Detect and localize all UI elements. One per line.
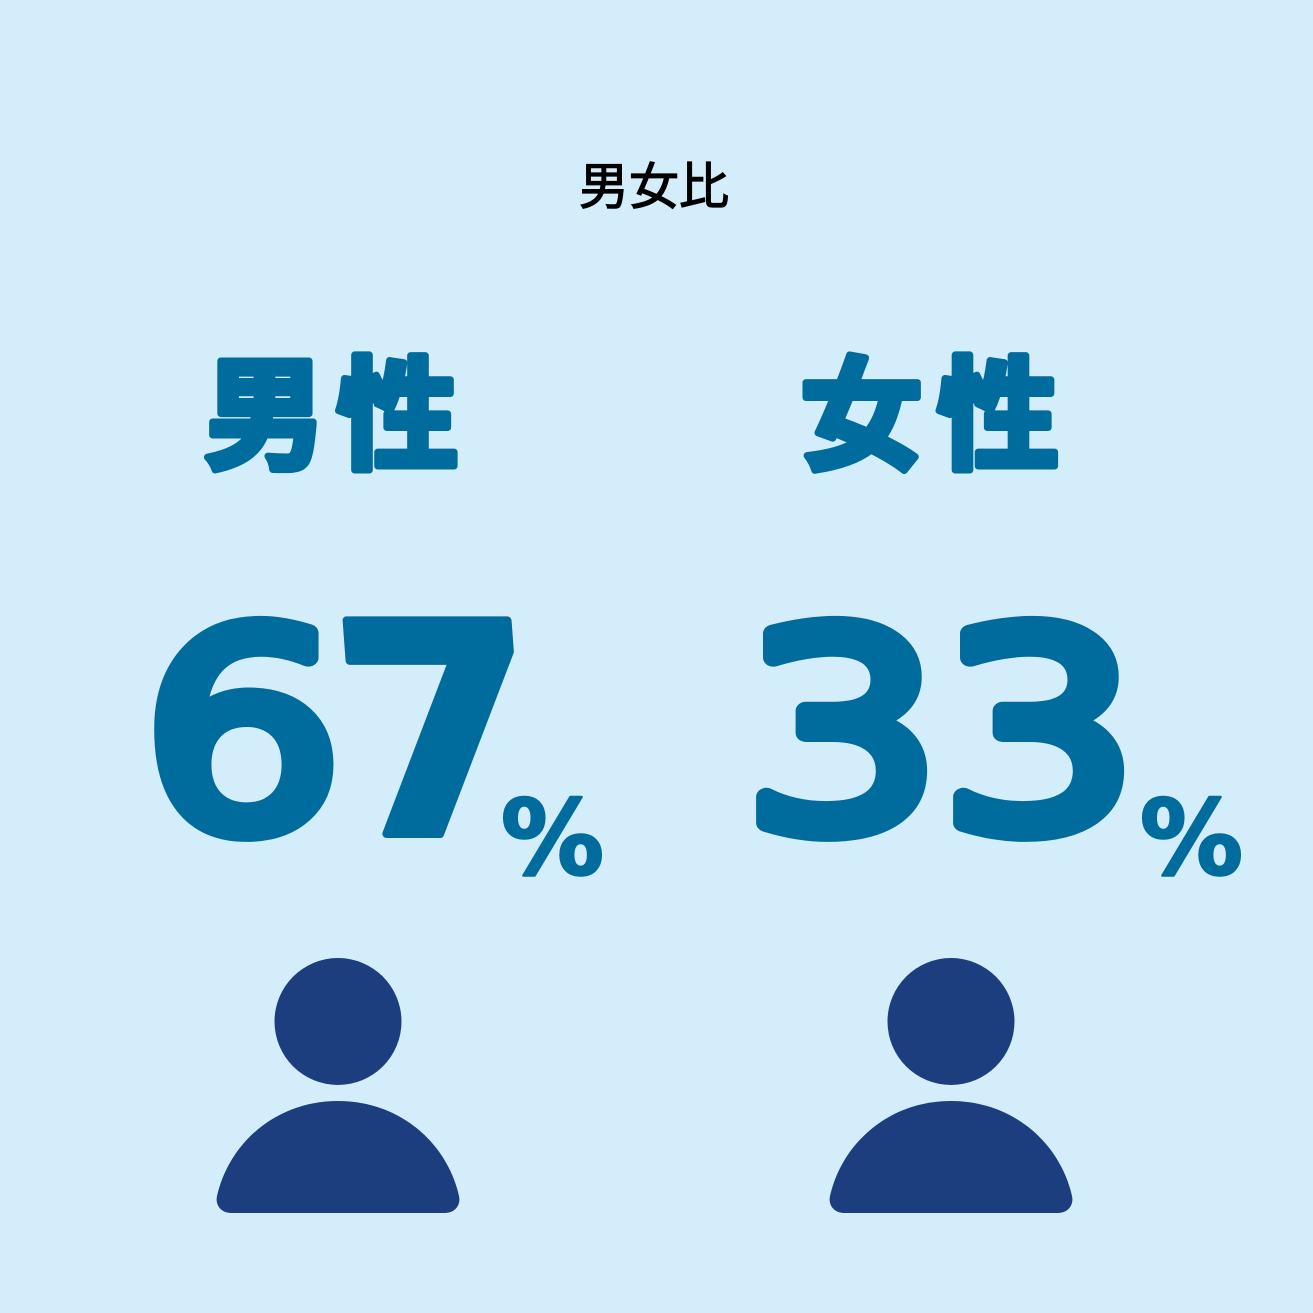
value: 33 percent (742, 573, 1243, 899)
label: male: 男性 (204, 349, 458, 485)
panel: female (742, 349, 1243, 1213)
panel: male (142, 349, 604, 1213)
value: 67 percent: % (501, 779, 604, 899)
icon: female person (830, 958, 1072, 1213)
value: 67 percent: 7 (323, 563, 552, 904)
label: female: 女性 (800, 349, 1059, 485)
icon: male person (217, 958, 459, 1213)
value: 67 percent (142, 563, 604, 904)
title: 男女比 (579, 159, 729, 215)
value: 33 percent: % (1140, 779, 1243, 899)
value: 67 percent: 6 (142, 573, 343, 894)
value: 33 percent: 3 (742, 573, 942, 894)
value: 33 percent: 3 (940, 573, 1139, 894)
